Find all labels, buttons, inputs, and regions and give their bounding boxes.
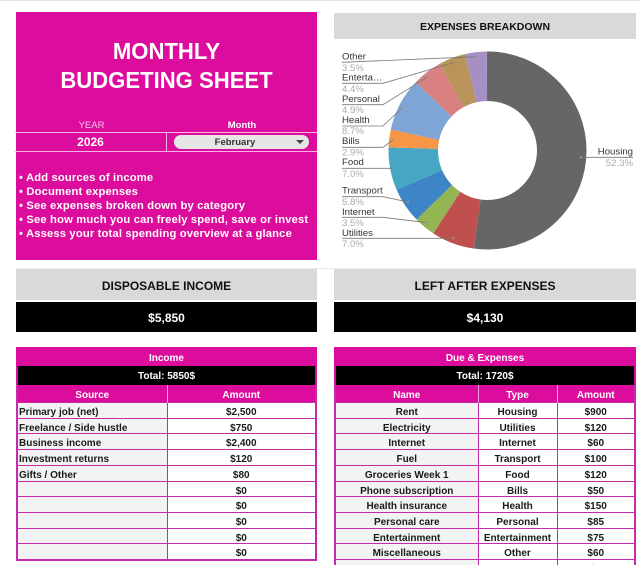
donut chart: expenses breakdown [342, 52, 633, 250]
expenses heading [334, 347, 636, 366]
heading: expenses breakdown: EXPENSES BREAKDOWN [420, 21, 550, 33]
value: left after expenses: $4,130 [467, 311, 503, 325]
income rows: Freelance / Side hustle [19, 423, 127, 434]
income total [16, 366, 317, 385]
category names: Transport [342, 186, 383, 196]
panel: title and instructions [16, 12, 317, 260]
income rows: Investment returns [19, 454, 109, 465]
heading: left after expenses: LEFT AFTER EXPENSES [415, 279, 555, 293]
income rows: $0 [236, 548, 247, 559]
panel: income table [16, 347, 317, 561]
expenses rows: $100 [585, 454, 607, 465]
month selector [166, 132, 317, 152]
category percentages [342, 63, 633, 250]
expenses rows: $50 [587, 486, 604, 497]
income rows: Source [75, 390, 109, 401]
expenses rows: Name [393, 390, 420, 401]
expenses rows: Internet [499, 438, 536, 449]
heading: disposable income: DISPOSABLE INCOME [102, 279, 231, 293]
category percentages: 52.3% [606, 158, 633, 169]
donut slices [413, 76, 562, 225]
expenses rows: Internet [388, 438, 425, 449]
expenses rows: Health insurance [366, 501, 447, 512]
category percentages: 4.4% [342, 84, 364, 95]
expenses rows: $900 [585, 407, 607, 418]
expenses rows: Type [506, 390, 529, 401]
expenses rows: Health [502, 501, 533, 512]
category percentages: 7.0% [342, 169, 364, 180]
expenses rows: Bills [507, 486, 528, 497]
category names: Personal [342, 94, 380, 105]
panel: due and expenses table [334, 347, 636, 565]
expenses rows [334, 385, 636, 565]
category names: Food [342, 157, 364, 168]
income rows: $80 [233, 470, 250, 481]
income total: Total: 5850$ [138, 371, 195, 382]
category names: Enterta… [342, 72, 383, 84]
income rows: $0 [236, 517, 247, 528]
category names: Utilities [342, 228, 373, 239]
category names: Bills [342, 136, 360, 147]
category percentages: 4.9% [342, 105, 364, 116]
month label: Month [228, 120, 256, 131]
value: left after expenses [334, 302, 636, 332]
expenses rows: Other [504, 548, 531, 559]
expenses rows: $60 [587, 438, 604, 449]
expenses rows: Entertainment [373, 533, 440, 544]
expenses total: Total: 1720$ [456, 371, 514, 382]
category percentages: 5.8% [342, 197, 364, 208]
expenses rows: Entertainment [484, 533, 551, 544]
year value [15, 132, 167, 152]
feature list: • Document expenses [19, 186, 138, 198]
title: BUDGETING SHEET [60, 67, 273, 93]
category names: Housing [598, 146, 633, 158]
category names [342, 52, 633, 239]
title: MONTHLY [113, 38, 220, 64]
category percentages: 3.5% [342, 218, 364, 229]
expenses rows: $120 [585, 423, 607, 434]
income rows: $2,500 [226, 407, 257, 418]
expenses rows: Food [505, 470, 530, 481]
income rows: $2,400 [226, 438, 257, 449]
income rows: $0 [236, 486, 247, 497]
feature list: • See expenses broken down by category [19, 200, 245, 212]
expenses rows: Utilities [499, 423, 536, 434]
category names: Health [342, 115, 370, 126]
expenses rows: Personal [496, 517, 539, 528]
year label: YEAR [79, 120, 104, 131]
heading: expenses breakdown [334, 13, 636, 39]
income heading: Income [149, 353, 184, 364]
expenses rows: Housing [498, 407, 538, 418]
value: disposable income: $5,850 [148, 311, 185, 325]
income rows: $120 [230, 454, 252, 465]
feature list: • See how much you can freely spend, save or invest [19, 214, 308, 226]
category percentages: 7.0% [342, 239, 364, 250]
expenses rows: Miscellaneous [373, 548, 441, 559]
expenses rows: Transport [494, 454, 541, 465]
category percentages: 3.5% [342, 63, 364, 74]
expenses rows: Phone subscription [360, 486, 453, 497]
year value: 2026 [77, 135, 104, 149]
expenses rows: $150 [585, 501, 607, 512]
income rows: $0 [236, 533, 247, 544]
expenses heading: Due & Expenses [446, 353, 524, 364]
expenses rows: $75 [587, 533, 604, 544]
value: disposable income [16, 302, 317, 332]
category names: Other [342, 52, 367, 62]
expenses total [334, 366, 636, 385]
expenses rows: Electricity [383, 423, 431, 434]
expenses rows: $60 [587, 548, 604, 559]
income rows: $750 [230, 423, 252, 434]
income rows [16, 385, 317, 561]
leader dots [392, 56, 582, 239]
expenses rows: Rent [396, 407, 418, 418]
income heading [16, 347, 317, 366]
expenses rows: Fuel [396, 454, 417, 465]
income rows: $0 [236, 501, 247, 512]
feature list: • Assess your total spending overview at a glance [19, 228, 292, 240]
income rows: Business income [19, 438, 101, 449]
heading: left after expenses [334, 269, 636, 300]
income rows: Primary job (net) [19, 407, 98, 418]
expenses rows: Amount [577, 390, 615, 401]
income rows: Amount [222, 390, 260, 401]
month selector: February [215, 137, 255, 148]
feature list: • Add sources of income [19, 172, 153, 184]
category percentages: 8.7% [342, 126, 364, 137]
expenses rows: $120 [585, 470, 607, 481]
heading: disposable income [16, 269, 317, 300]
expenses rows: $85 [587, 517, 604, 528]
category percentages: 2.9% [342, 148, 364, 158]
icon: dropdown arrow [296, 140, 304, 144]
category names: Internet [342, 207, 375, 218]
income rows: Gifts / Other [19, 470, 77, 481]
title [60, 38, 273, 93]
expenses rows: Groceries Week 1 [365, 470, 449, 481]
leader lines [342, 57, 633, 238]
feature list [19, 172, 308, 240]
expenses rows: Personal care [374, 517, 440, 528]
